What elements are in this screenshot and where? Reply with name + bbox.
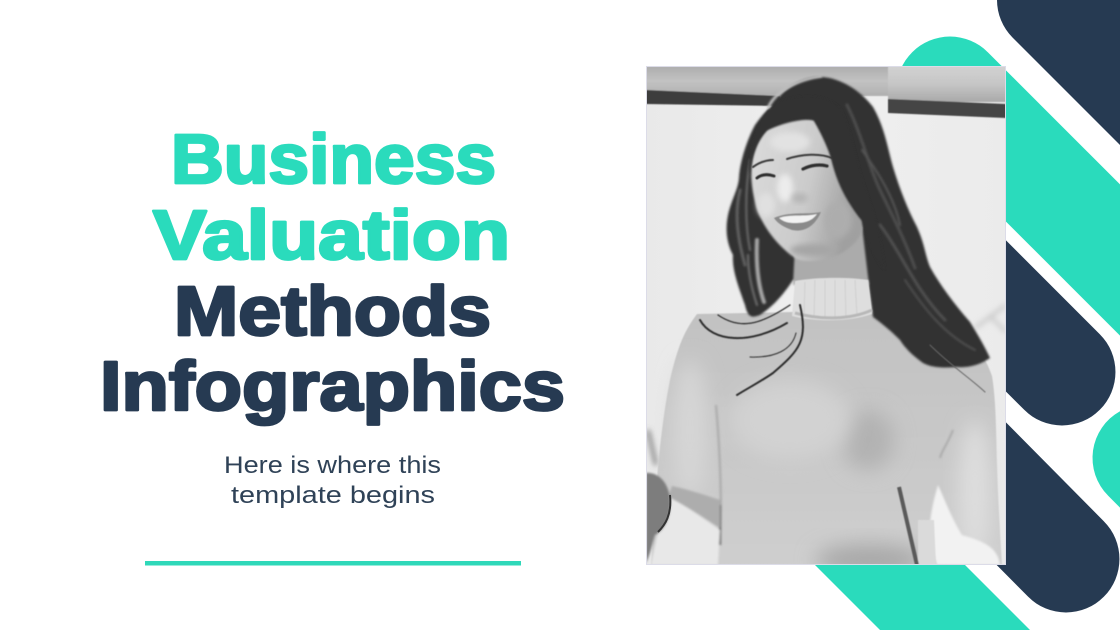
subtitle line 2: template begins	[231, 482, 435, 509]
pill: teal bottom	[770, 520, 1030, 630]
left sleeve fold and cuff	[651, 405, 953, 565]
subtitle line 1: Here is where this	[224, 452, 441, 479]
title line: Valuation: Valuation	[153, 196, 510, 274]
photo background wall	[646, 66, 1006, 565]
pen and notebook	[899, 487, 936, 565]
hair mass	[727, 77, 990, 368]
wristband	[658, 495, 670, 532]
photo: smiling woman in turtleneck	[646, 66, 1006, 576]
smile	[774, 212, 821, 231]
eyes and brows	[753, 155, 832, 178]
background plant blur	[648, 305, 1006, 465]
title line: Business: Business	[171, 120, 496, 198]
subtitle	[224, 452, 441, 509]
hair texture strands	[737, 105, 975, 350]
title line: Methods: Methods	[174, 272, 491, 350]
decorative diagonal pills	[770, 0, 1120, 630]
sweater soft shading	[672, 360, 991, 576]
accent rule	[145, 561, 521, 566]
hair strands on sweater	[700, 305, 985, 395]
title line: Infographics: Infographics	[100, 347, 565, 425]
pill: teal small right	[1093, 411, 1120, 508]
face	[751, 119, 863, 261]
pill: teal upper	[897, 37, 1120, 336]
pill: navy middle	[850, 184, 1115, 425]
sweater body	[651, 312, 1002, 565]
pill: navy top right	[997, 0, 1120, 145]
hair front sweep	[748, 106, 864, 228]
neck	[793, 226, 869, 285]
facial shadow and highlights	[757, 132, 852, 256]
turtleneck collar	[792, 278, 872, 320]
pill: navy lower	[800, 315, 1119, 612]
ceiling beam	[646, 66, 1006, 118]
title	[100, 120, 565, 425]
hand at left edge	[646, 473, 670, 563]
flyaway hair highlight	[768, 76, 822, 108]
photo edge	[646, 66, 1006, 564]
right sleeve highlights	[929, 485, 1000, 565]
